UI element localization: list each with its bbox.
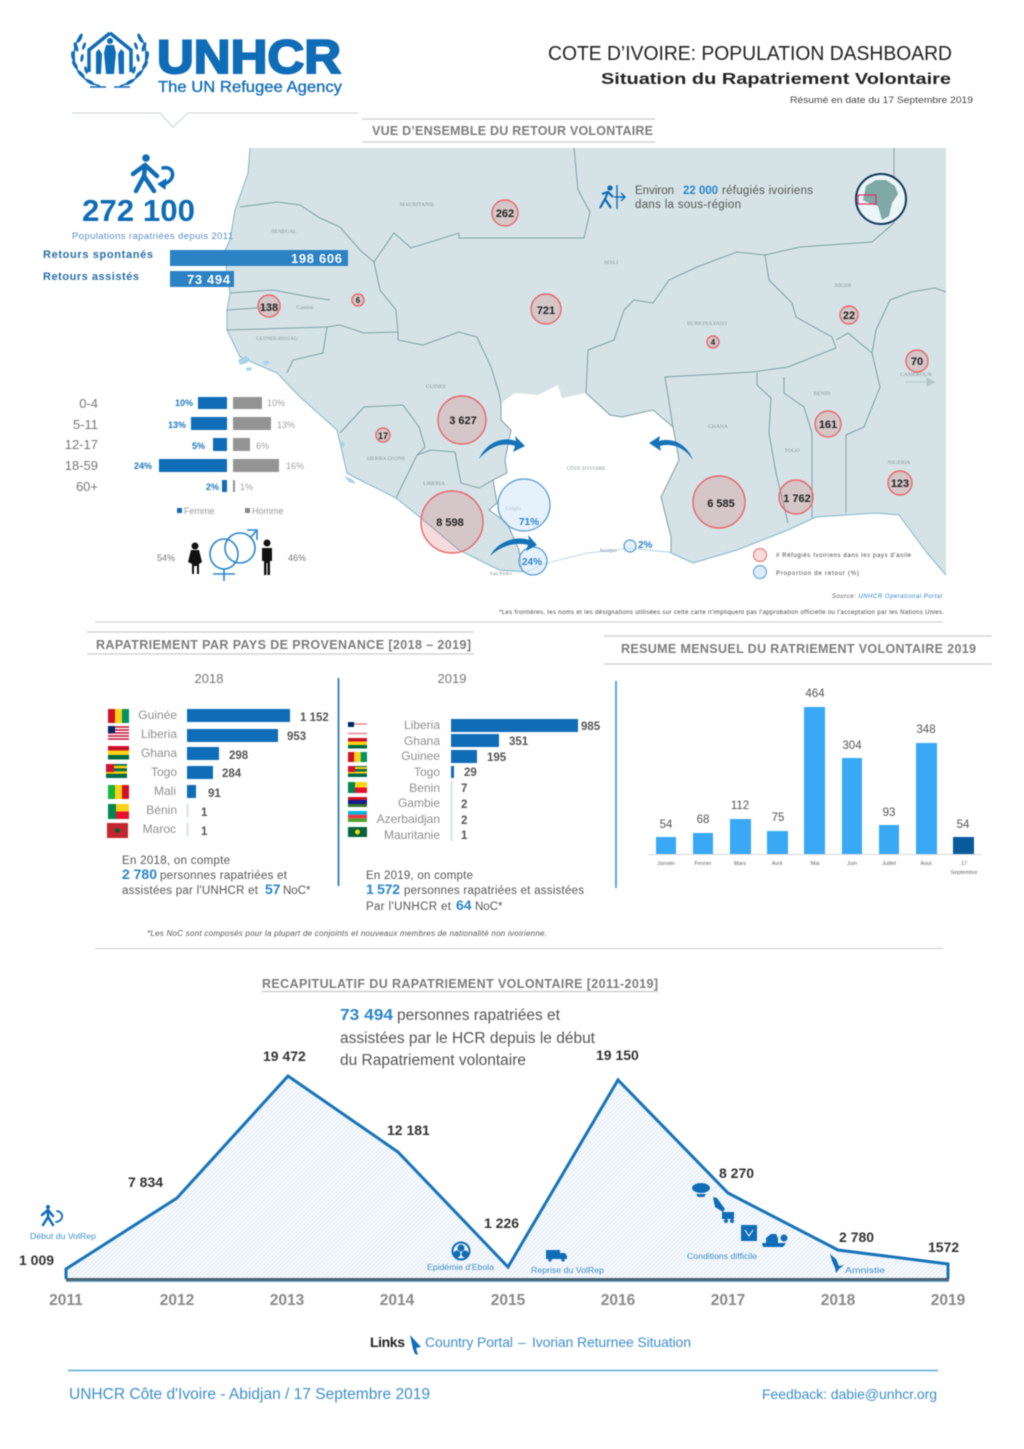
links: Ivorian Returnee Situation (532, 1334, 691, 1350)
event labels (30, 1232, 886, 1275)
map legend: # Réfugiés Ivoiriens dans les pays d'asile (776, 553, 912, 559)
country labels: San Pédro (490, 571, 512, 577)
country labels (256, 202, 932, 577)
values: 93 (883, 807, 895, 819)
note 2019: personnes rapatriées et assistées (404, 885, 584, 897)
note 2018: NoC* (283, 885, 311, 897)
values: 12 181 (387, 1122, 430, 1138)
date: Résumé en date du 17 Septembre 2019 (790, 95, 973, 106)
baseline (66, 1278, 949, 1281)
callout: refugees in sub-region (635, 185, 813, 211)
return proportion circles: 2% (638, 540, 653, 551)
heading: overview (362, 119, 655, 142)
chart: monthly summary 2019 (648, 688, 982, 876)
men percentages: 13% (277, 420, 295, 430)
months (657, 861, 977, 876)
country labels 2018: Mali (154, 784, 176, 798)
refugee circles: 123 (891, 478, 909, 490)
months: Avril (772, 861, 782, 867)
note 2019: NoC* (475, 901, 503, 913)
months: Mai (811, 861, 819, 867)
callout: total assisted: personnes rapatriées et (397, 1007, 561, 1024)
section rule (95, 948, 943, 950)
refugee circles: 4 (711, 338, 716, 347)
values: 19 472 (263, 1048, 306, 1064)
links: – (518, 1334, 526, 1350)
age labels: 0-4 (79, 396, 98, 411)
refugee circles: 22 (843, 310, 855, 322)
spontaneous returns (43, 249, 348, 266)
women bars (159, 397, 227, 492)
return proportion circles (498, 479, 653, 575)
note 2018 (122, 855, 311, 897)
age labels: 5-11 (73, 417, 98, 432)
country labels 2019: Gambie (398, 796, 440, 810)
values 2018: 1 152 (300, 712, 329, 724)
note 2018: En 2018, on compte (122, 855, 230, 867)
map legend: Proportion de retour (%) (776, 571, 859, 577)
values 2019: 1 (461, 830, 468, 842)
map borders (227, 148, 946, 570)
country labels 2019: Benin (409, 781, 440, 795)
title: COTE D’IVOIRE: POPULATION DASHBOARD (548, 43, 952, 65)
flags 2019 (348, 722, 367, 837)
months: Mars (734, 861, 746, 867)
country labels: Abidjan (599, 548, 617, 554)
key figure: 272 100 (82, 193, 195, 228)
assisted returns: Retours assistés (43, 271, 139, 283)
note 2018: assistées par l'UNHCR et (122, 885, 259, 897)
refugee circles: 8 598 (436, 517, 464, 529)
months: Janvier (657, 861, 675, 867)
icon: locator globe (856, 174, 906, 224)
men bars (233, 397, 279, 492)
refugee circles: 262 (496, 208, 514, 220)
section rule (95, 621, 943, 623)
header rule with notch (72, 113, 358, 127)
values 2018: 953 (287, 731, 306, 743)
callout: total assisted: 73 494 (340, 1007, 393, 1024)
heading: repatriation by country: RAPATRIEMENT PAR PAYS DE PROVENANCE [2018 – 2019] (96, 638, 471, 652)
values: 68 (697, 814, 709, 826)
country labels: TOGO (784, 448, 800, 454)
values: 1572 (928, 1239, 959, 1255)
years: 2012 (160, 1292, 194, 1309)
country: Côte d'Ivoire (489, 385, 679, 572)
legend (177, 506, 284, 516)
values: 7 834 (128, 1174, 163, 1190)
icon: gender symbols (210, 530, 257, 581)
note 2019: Par l'UNHCR et (366, 901, 452, 913)
bars 2019 (451, 719, 578, 778)
values 2019: 195 (487, 752, 507, 764)
values: 112 (731, 800, 749, 812)
values 2019: 7 (461, 783, 467, 795)
note 2018: personnes rapatriées et (160, 870, 288, 882)
values: 54 (957, 819, 970, 831)
event labels: Début du VolRep (30, 1232, 97, 1241)
values (19, 1047, 959, 1268)
map disclaimer: *Les frontières, les noms et les désignations utilisées sur cette carte n'impliquent pas l'approbation officielle ou l'acceptation par les Nations Unies. (499, 610, 944, 616)
heading: overview: VUE D’ENSEMBLE DU RETOUR VOLONTAIRE (372, 124, 653, 138)
country labels 2018: Togo (151, 765, 177, 779)
icon: dove for amnesty (830, 1254, 844, 1273)
event labels: Epidémie d'Ebola (427, 1263, 495, 1272)
country labels 2019: Liberia (404, 718, 440, 732)
refugee circles: 6 (356, 296, 361, 305)
icon: woman (188, 542, 202, 574)
refugee circles: 17 (378, 431, 388, 441)
years: 2014 (380, 1292, 415, 1309)
event labels: Amnistie (845, 1266, 886, 1275)
country labels: GHANA (708, 424, 728, 430)
spontaneous returns: Retours spontanés (43, 249, 153, 261)
refugee circles: 6 585 (707, 498, 735, 510)
small bars 2018 (186, 804, 188, 836)
map legend (754, 548, 912, 578)
men percentages: 10% (267, 398, 285, 408)
map coast (224, 148, 946, 575)
logo: UNHCR (70, 30, 342, 96)
event labels: Conditions difficile (687, 1252, 758, 1261)
event labels: Reprise du VolRep (531, 1266, 605, 1275)
values: 54 (660, 819, 673, 831)
country labels 2018 (138, 708, 177, 836)
months: Septembre (951, 870, 977, 876)
return proportion circles: 24% (522, 557, 542, 568)
icon: UNHCR emblem (70, 33, 150, 87)
links (370, 1334, 691, 1355)
values: 304 (842, 740, 862, 752)
chart: 2018 by country: 2018 (195, 671, 223, 686)
key figure caption: Populations rapatriées depuis 2011 (72, 231, 233, 242)
values (660, 688, 970, 831)
current month bar (953, 837, 974, 854)
callout: refugees in sub-region: dans la sous-région (635, 199, 741, 211)
country labels: SENEGAL (271, 229, 297, 235)
values 2018: 284 (222, 768, 242, 780)
country labels 2018: Ghana (141, 746, 177, 760)
refugee circles: 70 (911, 356, 923, 368)
gender split (157, 530, 306, 581)
small bars 2019 (450, 781, 452, 841)
refugee circles: 3 627 (449, 415, 477, 427)
note 2019 (366, 870, 584, 913)
values: 19 150 (596, 1047, 639, 1063)
country labels: Gambie (296, 305, 314, 311)
values 2018: 298 (229, 750, 249, 762)
area (66, 1076, 948, 1279)
country labels 2019: Mauritanie (384, 828, 440, 842)
values 2018: 1 (201, 807, 208, 819)
legend: Homme (252, 506, 284, 516)
country labels 2019: Ghana (404, 734, 440, 748)
values 2018: 1 (201, 826, 208, 838)
country labels 2019: Azerbaidjan (377, 812, 440, 826)
values 2019 (461, 721, 601, 842)
values 2019: 29 (464, 767, 477, 779)
icon: man (262, 540, 272, 575)
values: 1 009 (19, 1252, 54, 1268)
country labels 2018: Maroc (143, 822, 176, 836)
values: 75 (772, 812, 784, 824)
gender split: 54% (157, 553, 175, 563)
chart: recap area chart (19, 1047, 966, 1309)
icon: refugees crossing (600, 185, 625, 209)
country labels 2018: Bénin (146, 803, 177, 817)
values 2018 (201, 712, 329, 838)
chart: 2019 by country: 2019 (438, 671, 466, 686)
values 2019: 2 (461, 815, 467, 827)
refugee circles: 161 (819, 419, 837, 431)
values: 348 (916, 724, 936, 736)
map land (224, 148, 946, 575)
country labels: GUINEE (426, 384, 447, 390)
country labels: GUINEE-BISSAU (256, 336, 298, 342)
refugee circles: 721 (537, 305, 555, 317)
country labels: MAURITANIE (400, 202, 435, 208)
icon: cursor (410, 1335, 421, 1355)
spontaneous returns: 198 606 (291, 251, 342, 266)
icon: start of voluntary repatriation (42, 1205, 62, 1225)
callout: refugees in sub-region: Environ (635, 185, 674, 197)
values 2019: 2 (461, 799, 467, 811)
country labels 2018: Guinée (138, 708, 177, 722)
divider (615, 681, 617, 888)
arrows (479, 436, 693, 556)
chart: 2019 by country (348, 671, 601, 842)
assisted returns (43, 271, 234, 287)
return proportion circles: 71% (519, 517, 539, 528)
country labels: NIGERIA (888, 460, 910, 466)
bars (656, 707, 937, 854)
logo wordmark: UNHCR (157, 30, 341, 83)
panel: return types (43, 249, 348, 287)
months: Juillet (882, 861, 897, 867)
age labels: 60+ (76, 479, 98, 494)
country labels: BENIN (814, 391, 830, 397)
men percentages: 1% (240, 482, 253, 492)
gender split: 46% (288, 553, 306, 563)
chart: 2018 by country (106, 671, 329, 838)
years: 2013 (270, 1292, 305, 1309)
values: 2 780 (839, 1229, 874, 1245)
values 2019: 351 (509, 736, 529, 748)
heading: repatriation by country (87, 632, 474, 654)
icons: difficult conditions (692, 1183, 788, 1247)
callout: refugees in sub-region: 22 000 (683, 185, 718, 197)
bars 2018 (187, 709, 290, 798)
assisted returns: 73 494 (187, 272, 231, 287)
map source: Source: UNHCR Operational Portal (832, 594, 943, 600)
country labels: CAMEROUN (900, 372, 932, 378)
values: 464 (805, 688, 825, 700)
age labels: 18-59 (65, 458, 98, 473)
women percentages: 13% (168, 420, 186, 430)
links: Country Portal (425, 1334, 513, 1350)
line (66, 1076, 948, 1279)
country labels 2018: Liberia (141, 727, 177, 741)
divider (338, 678, 340, 886)
country labels: LIBERIA (423, 481, 445, 487)
months: Aout (920, 861, 932, 867)
links: Links (370, 1334, 405, 1350)
men percentages: 16% (286, 461, 304, 471)
country labels 2019: Guinee (401, 749, 440, 763)
legend: Femme (184, 506, 215, 516)
callout: refugees in sub-region: réfugiés ivoiriens (722, 185, 813, 197)
women percentages: 5% (192, 441, 205, 451)
values 2018: 91 (208, 788, 221, 800)
years: 2011 (49, 1292, 83, 1309)
logo tagline: The UN Refugee Agency (158, 79, 342, 96)
country labels 2019: Togo (414, 765, 440, 779)
country labels: MALI (604, 260, 618, 266)
heading: monthly summary: RESUME MENSUEL DU RATRIEMENT VOLONTAIRE 2019 (621, 642, 976, 656)
men percentages (240, 398, 304, 492)
icon: truck (546, 1250, 567, 1262)
icon: ebola (452, 1242, 470, 1260)
refugee circles: 1 762 (783, 493, 811, 505)
note 2018: 57 (265, 881, 281, 897)
months: 17 (961, 861, 967, 867)
note 2019: 64 (456, 897, 472, 913)
country labels: Guiglo (505, 506, 521, 512)
callout: total assisted: assistées par le HCR depuis le début (340, 1030, 596, 1047)
note 2019: 1 572 (366, 881, 400, 897)
years: 2016 (601, 1292, 636, 1309)
country labels: SIERRA LEONE (367, 456, 406, 462)
country labels 2019 (377, 718, 440, 842)
subtitle: Situation du Rapatriement Volontaire (601, 71, 951, 88)
values: 1 226 (484, 1215, 519, 1231)
footer right: Feedback: dabie@unhcr.org (762, 1386, 937, 1402)
callout: total assisted: du Rapatriement volontaire (340, 1052, 526, 1069)
heading: monthly summary (604, 636, 992, 664)
women percentages: 24% (134, 461, 152, 471)
years: 2017 (711, 1292, 745, 1309)
men percentages: 6% (256, 441, 269, 451)
women percentages: 2% (206, 482, 219, 492)
coastal islands (238, 356, 356, 484)
country labels: BURKINA FASO (687, 321, 727, 327)
heading: recap: RECAPITULATIF DU RAPATRIEMENT VOLONTAIRE [2011-2019] (262, 977, 658, 991)
years: 2018 (821, 1292, 856, 1309)
note 2018: 2 780 (122, 866, 157, 882)
months: Fevrier (694, 861, 712, 867)
age labels: 12-17 (65, 437, 98, 452)
panel: map (224, 148, 946, 578)
footer left: UNHCR Côte d'Ivoire - Abidjan / 17 Septembre 2019 (69, 1386, 430, 1403)
values 2019: 985 (581, 721, 601, 733)
axis (648, 854, 982, 856)
flags 2018 (106, 709, 129, 838)
refugee circles: 138 (260, 302, 278, 314)
country labels: NIGER (835, 283, 852, 289)
Cameroon arrow (905, 378, 935, 386)
footer rule (68, 1370, 938, 1372)
years: 2015 (491, 1292, 526, 1309)
country labels: CÔTE D'IVOIRE (566, 464, 606, 472)
values: 8 270 (719, 1165, 754, 1181)
icon: walking person returning (133, 154, 173, 191)
note 2019: En 2019, on compte (366, 870, 473, 882)
women percentages: 10% (175, 398, 193, 408)
years: 2019 (931, 1292, 966, 1309)
women percentages (134, 398, 219, 492)
age labels (65, 396, 98, 494)
callout: total assisted (340, 1007, 596, 1069)
chart: age pyramid (65, 396, 304, 516)
refugee circles (258, 200, 928, 553)
months: Juin (847, 861, 857, 867)
years (49, 1292, 966, 1309)
NoC footnote: *Les NoC sont composés pour la plupart de conjoints et nouveaux membres de nationalité non ivoirienne. (147, 929, 547, 938)
